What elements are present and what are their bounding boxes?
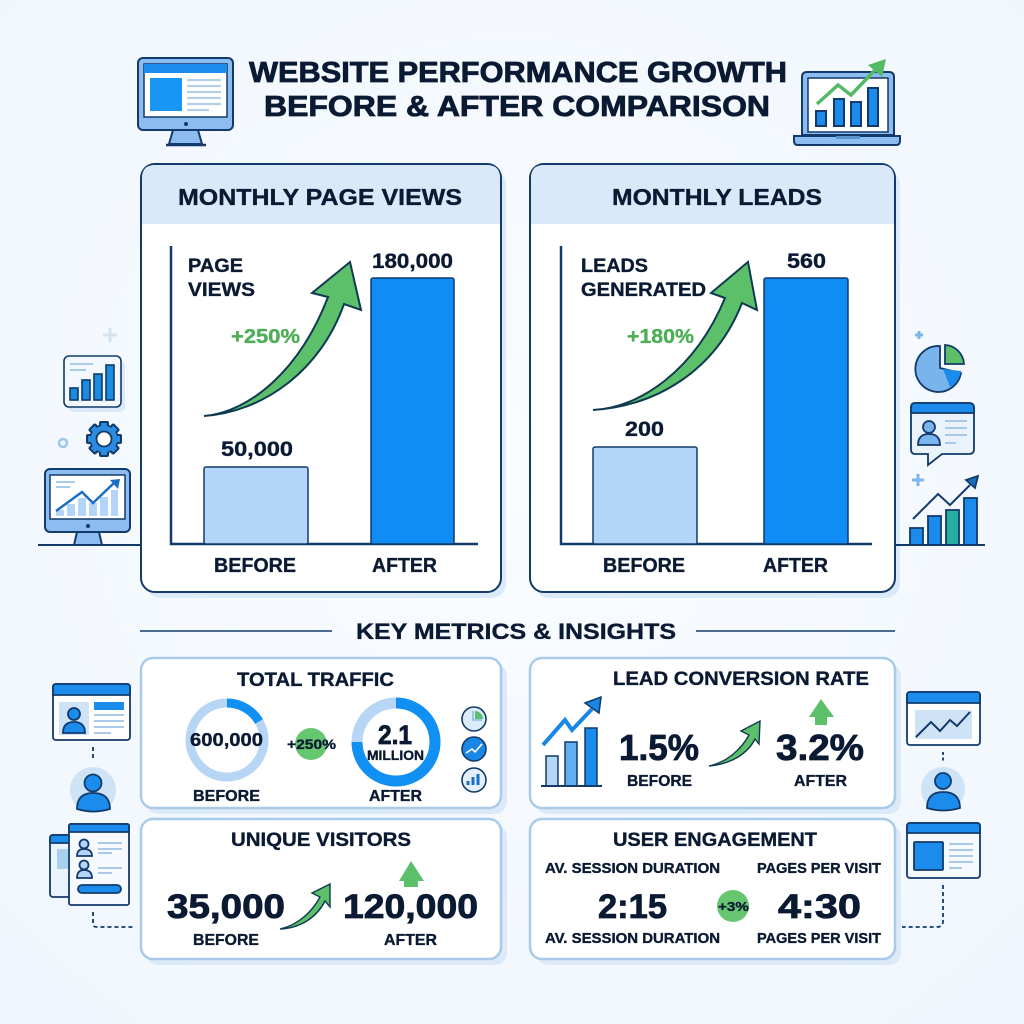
bar: before [593, 447, 697, 544]
value: 4:30: 4:30 [778, 888, 861, 926]
heading: total traffic: TOTAL TRAFFIC [237, 670, 394, 691]
up arrow [809, 699, 834, 725]
badge: +3%: +3% [718, 899, 750, 914]
donut: after [357, 703, 435, 781]
panel header: monthly leads: MONTHLY LEADS [612, 184, 822, 210]
bar label: after: AFTER [372, 555, 438, 577]
icon: small ring [59, 439, 67, 447]
badge: +3% [717, 890, 750, 922]
bar label: before: BEFORE [603, 555, 685, 577]
label: after: AFTER [369, 788, 422, 805]
value: after: MILLION [367, 747, 424, 763]
label: before: BEFORE [627, 773, 692, 790]
value: before: 50,000 [221, 438, 293, 461]
icon: small trend badge [462, 737, 486, 761]
axis label: leads generated: LEADS [581, 256, 648, 277]
chart axes [171, 246, 478, 544]
value: after: 180,000 [372, 250, 453, 273]
donut: before [190, 703, 264, 777]
value: before: 200 [625, 418, 664, 441]
panel header: monthly leads [531, 165, 894, 224]
value: after: 560 [787, 250, 826, 273]
left ground line [38, 544, 140, 546]
label: session duration bottom: AV. SESSION DURATION [545, 931, 720, 947]
right connector bottom [902, 885, 943, 927]
title [249, 57, 787, 123]
panel: user engagement [530, 819, 901, 965]
panel: monthly page views [141, 164, 506, 598]
icon: pie chart [915, 345, 964, 392]
icon: stacked profile windows [50, 824, 129, 905]
panel: lead conversion rate [530, 658, 901, 814]
bar label: after: AFTER [763, 555, 829, 577]
bar: after [764, 278, 848, 544]
heading: unique visitors: UNIQUE VISITORS [231, 830, 411, 851]
left connector bottom [93, 912, 135, 927]
value: before: 35,000 [167, 888, 285, 926]
value: before: 1.5% [619, 727, 699, 768]
bar: after [371, 278, 454, 544]
axis label: page views: VIEWS [188, 280, 255, 301]
growth arrow [593, 262, 757, 410]
axis label: page views: PAGE [188, 256, 243, 277]
right connector top [942, 752, 944, 762]
left connector top [92, 747, 94, 761]
panel: unique visitors [141, 819, 507, 965]
label: after: AFTER [384, 932, 437, 949]
icon: profile speech card [911, 403, 974, 465]
growth label: +250% [231, 326, 300, 348]
chart axes [561, 246, 872, 544]
label: before: BEFORE [193, 932, 259, 949]
axis label: page views [188, 256, 255, 301]
heading: user engagement: USER ENGAGEMENT [613, 830, 817, 851]
heading: lead conversion rate: LEAD CONVERSION RATE [613, 669, 869, 690]
panel header: monthly page views: MONTHLY PAGE VIEWS [178, 184, 462, 210]
badge: +250%: +250% [287, 736, 337, 752]
icon: left browser with profile [53, 684, 130, 740]
icon: left plus [103, 328, 117, 342]
growth label: +180% [627, 326, 694, 348]
icon: gear [86, 421, 122, 457]
icon: right user [921, 767, 965, 811]
icon: monitor with trend chart [45, 469, 130, 545]
axis label: leads generated: GENERATED [581, 280, 706, 301]
bar: before [204, 467, 308, 544]
axis label: leads generated [581, 256, 706, 301]
value: 2:15: 2:15 [598, 888, 667, 926]
icon: left user [70, 767, 116, 813]
curved arrow [709, 721, 760, 766]
panel: monthly leads [530, 164, 900, 598]
icon: laptop with growth chart [794, 59, 900, 145]
value: after: 3.2% [776, 727, 864, 768]
value: after [367, 720, 424, 763]
icon: right browser with line chart [907, 692, 980, 745]
bar label: before: BEFORE [214, 555, 296, 577]
icon: desktop monitor with web page [138, 58, 233, 145]
label: after: AFTER [794, 773, 847, 790]
title: WEBSITE PERFORMANCE GROWTH [249, 57, 787, 89]
up arrow [399, 861, 424, 887]
icon: right browser window [907, 823, 980, 878]
icon: bars and trend [895, 476, 985, 545]
section heading: key metrics: KEY METRICS & INSIGHTS [356, 619, 676, 644]
icon: chart card [64, 356, 125, 412]
label: pages per visit top: PAGES PER VISIT [757, 861, 881, 877]
value: after: 120,000 [343, 888, 478, 926]
panel header: monthly page views [142, 165, 500, 224]
badge: +250% [287, 728, 337, 760]
label: pages per visit bottom: PAGES PER VISIT [757, 931, 881, 947]
icon: right plus top [915, 331, 923, 339]
growth arrow [204, 262, 361, 416]
icon: rising bars [541, 697, 602, 786]
title: BEFORE & AFTER COMPARISON [264, 91, 770, 123]
value: before: 600,000 [190, 730, 263, 750]
value: after: 2.1 [378, 720, 412, 750]
icon: right plus bottom [912, 474, 924, 486]
label: before: BEFORE [193, 788, 260, 805]
panel: total traffic [141, 658, 507, 814]
curved arrow [280, 884, 330, 929]
icon: small pie badge [462, 707, 486, 731]
icon: small bars badge [462, 768, 486, 792]
label: session duration top: AV. SESSION DURATION [545, 861, 720, 877]
